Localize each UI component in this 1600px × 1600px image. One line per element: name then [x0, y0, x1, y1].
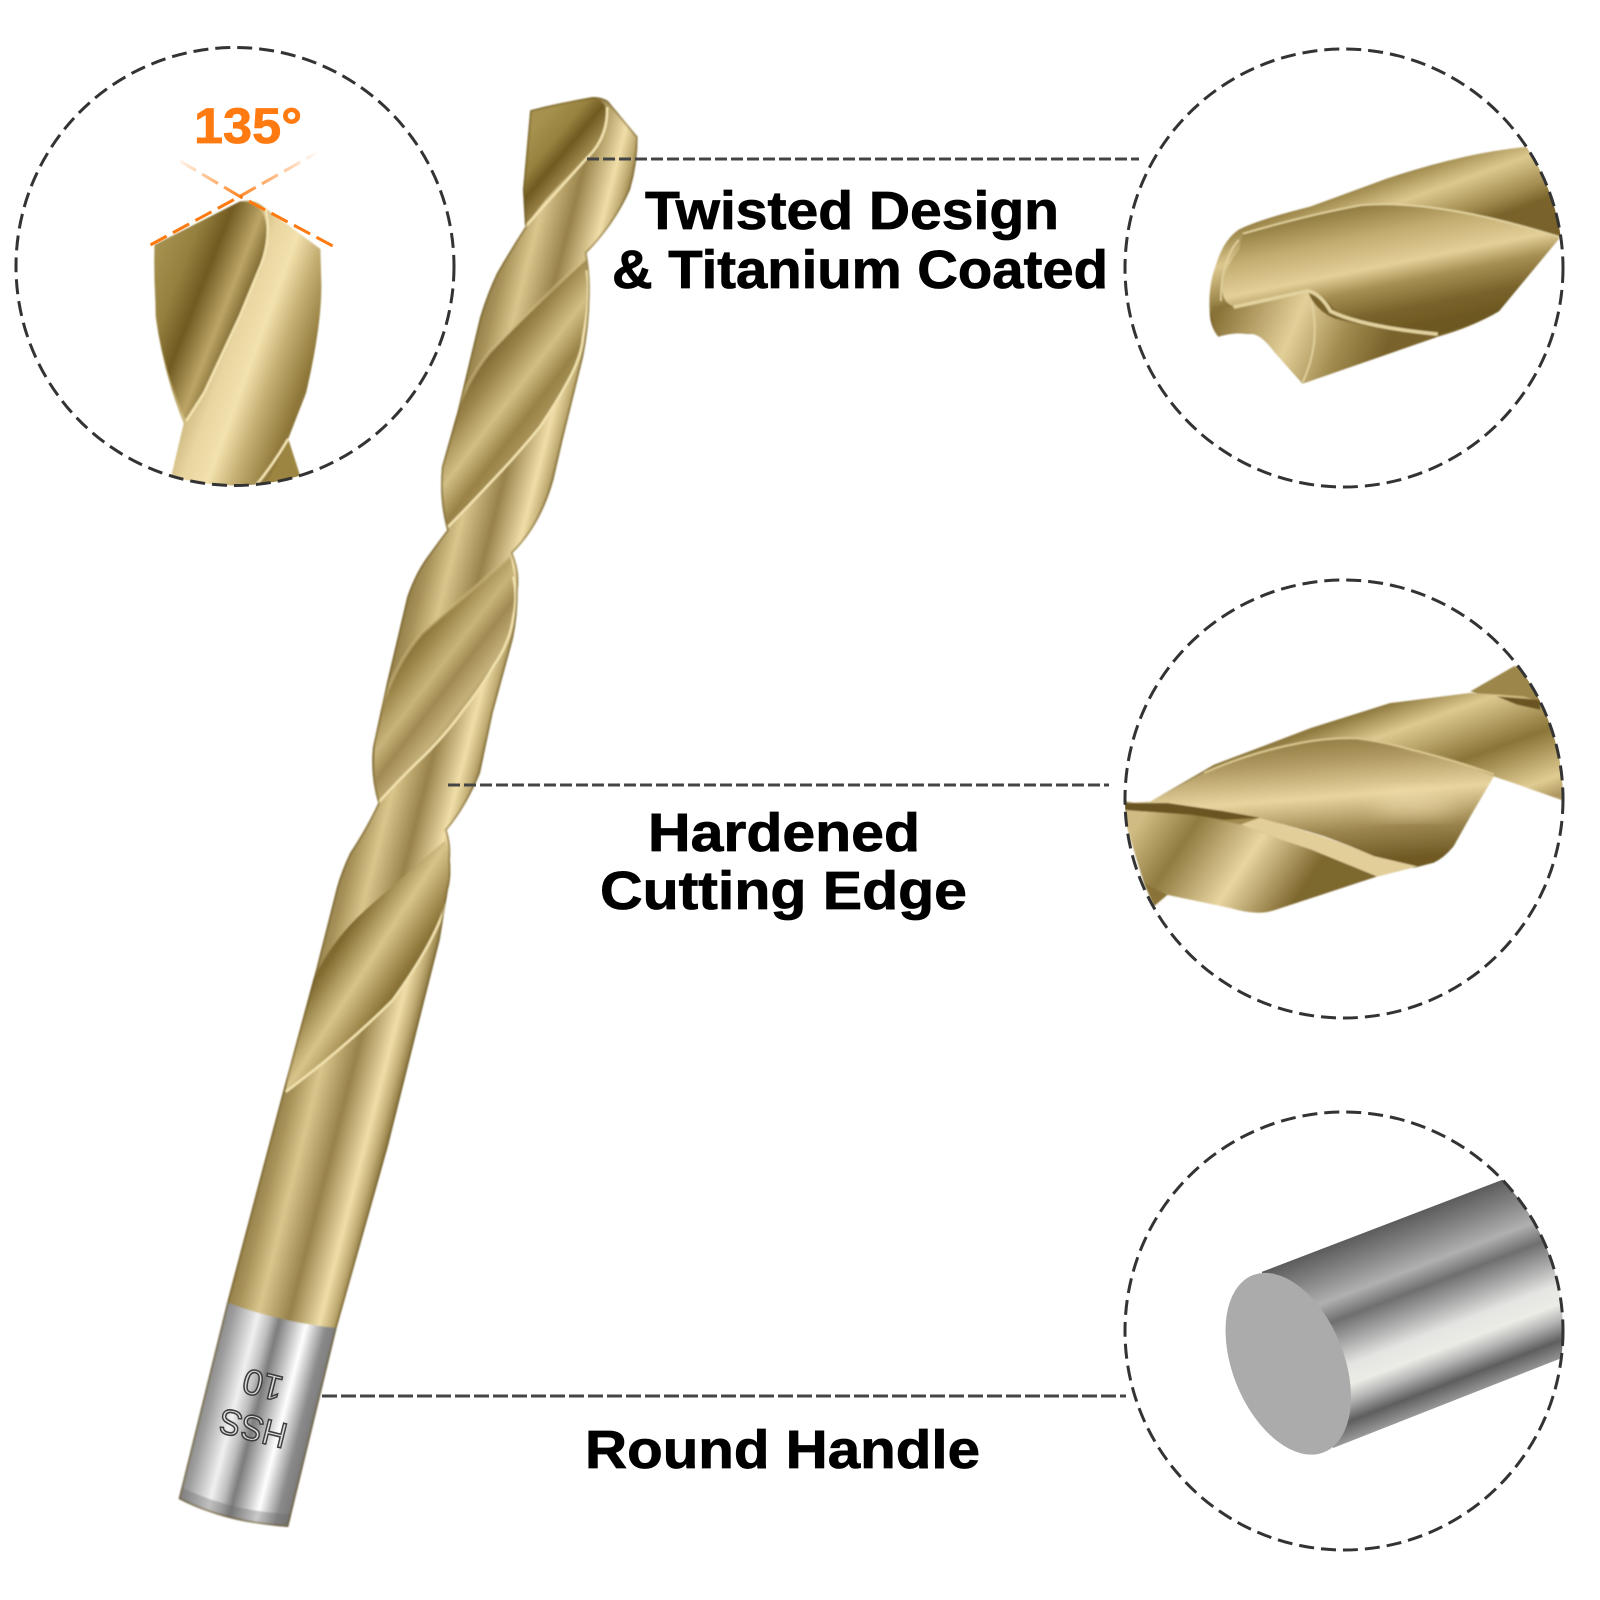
- tip flute: [154, 202, 267, 421]
- tip edge highlight: [186, 208, 268, 421]
- back wedge: [1470, 665, 1540, 702]
- central flute: [1124, 738, 1494, 868]
- silver round shank: [179, 1303, 337, 1527]
- tip land: [155, 201, 321, 510]
- upper flute soft ridges: [380, 258, 587, 710]
- inset: 135 degree tip: [16, 48, 454, 510]
- close-up flute: [1222, 204, 1560, 334]
- heading: twisted design: [612, 181, 1108, 300]
- connector line: twisted design: [587, 158, 1139, 160]
- lower land: [1121, 810, 1377, 913]
- heading: twisted design: Twisted Design: [645, 181, 1059, 241]
- close-up body: [1209, 147, 1576, 384]
- flute edge highlights: [286, 107, 607, 1092]
- cylinder body: [1262, 1180, 1563, 1448]
- inset: twisted tip close-up: [1125, 49, 1576, 487]
- flute near tip: [523, 97, 607, 227]
- connector line: hardened edge: [448, 784, 1109, 786]
- close-up lower land: [1212, 291, 1438, 384]
- base between flute and lower land: [1121, 801, 1417, 877]
- angle value: 135°: [194, 98, 302, 154]
- gold drill body: [178, 96, 638, 1528]
- lower flute: [286, 841, 451, 1092]
- heading: hardened cutting edge: Cutting Edge: [600, 861, 967, 921]
- dashed circle: [1125, 1112, 1563, 1550]
- upper ridge: [1204, 738, 1494, 774]
- heading: hardened cutting edge: Hardened: [648, 803, 920, 863]
- engraved HSS 10 marking: HSS: [215, 1400, 291, 1456]
- heading: hardened cutting edge: [600, 803, 967, 921]
- shank end shading: [180, 1488, 288, 1525]
- heading: round handle: Round Handle: [585, 1420, 980, 1480]
- body edge shading: [179, 97, 638, 1527]
- upper flute: [441, 259, 588, 527]
- light band under ridge: [1241, 818, 1417, 877]
- heading: twisted design: & Titanium Coated: [612, 240, 1108, 300]
- inset: round handle close-up: [1125, 1112, 1600, 1550]
- angle lines: [151, 152, 333, 246]
- upper land: [1151, 693, 1581, 806]
- dark slits: [1497, 696, 1540, 710]
- engraved HSS 10 marking: [215, 1360, 291, 1456]
- engraved HSS 10 marking: 10: [239, 1360, 287, 1409]
- notch: [1144, 883, 1167, 906]
- back flute: [267, 440, 300, 482]
- dashed circle: [1125, 580, 1563, 1018]
- middle flute: [374, 557, 515, 803]
- close-up edge highlights: [1221, 204, 1560, 383]
- inset: cutting edge close-up: [1121, 580, 1581, 1018]
- dashed circle: [1125, 49, 1563, 487]
- connector line: round handle: [322, 1394, 1126, 1398]
- flute highlight: [1371, 794, 1458, 813]
- cylinder end face: [1226, 1272, 1351, 1455]
- dashed circle: [16, 48, 454, 486]
- main drill bit: [178, 96, 639, 1528]
